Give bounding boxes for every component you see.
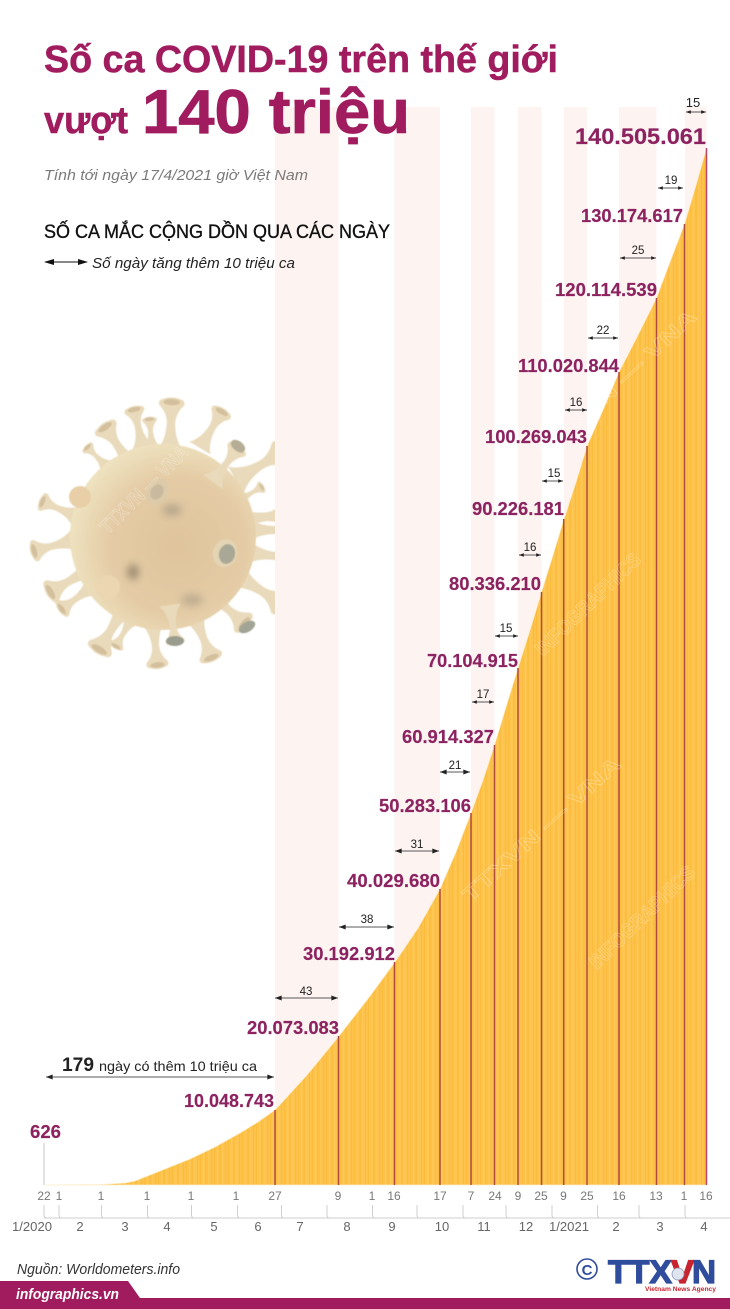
x axis: day labels: 16 [699,1189,713,1203]
day-span arrows: 16 [570,397,582,409]
legend: arrow meaning: Số ngày tăng thêm 10 triệu ca [92,255,295,272]
milestone value labels: 626 [30,1121,61,1142]
x axis: day labels: 1 [188,1189,195,1203]
day-span arrows: 15 [548,468,560,480]
logo: TTXVN: TTX [608,1254,673,1290]
footer band: infographics.vn [16,1286,119,1303]
milestone value labels: 10.048.743 [184,1090,274,1111]
x axis: month labels: 11 [477,1219,491,1234]
x axis: day labels: 17 [433,1189,447,1203]
x axis: day labels: 1 [56,1189,63,1203]
callout: 179 days: ngày có thêm 10 triệu ca [99,1058,257,1074]
chart heading: SỐ CA MẮC CỘNG DỒN QUA CÁC NGÀY [44,221,390,243]
logo: TTXVN: Vietnam News Agency [645,1286,716,1293]
x axis: month labels: 2 [76,1219,84,1234]
x axis: day labels: 9 [560,1189,567,1203]
callout: 179 days [46,1055,274,1077]
logo: TTXVN: V [671,1254,695,1290]
milestone value labels: 100.269.043 [485,426,587,447]
day-span arrows: 25 [632,245,644,257]
milestone value labels: 70.104.915 [427,650,518,671]
logo: TTXVN: N [692,1254,716,1290]
logo: TTXVN [577,1254,716,1293]
background month stripes [275,107,706,1185]
day-span arrows: 21 [449,760,461,772]
day-span arrows: 31 [411,839,423,851]
x axis: month labels: 3 [656,1219,664,1234]
x axis: month labels: 6 [254,1219,262,1234]
x axis: day labels: 22 [37,1189,51,1203]
milestone value labels: 20.073.083 [247,1017,339,1038]
x axis: month labels: 4 [700,1219,708,1234]
x axis: month labels: 4 [163,1219,171,1234]
milestone value labels: 30.192.912 [303,943,395,964]
illustration: coronavirus [29,397,275,670]
source: Nguồn: Worldometers.info [17,1262,180,1278]
day-span arrows [275,95,706,998]
milestone value labels [30,124,706,1142]
x axis: day labels: 9 [335,1189,342,1203]
x axis: month labels [12,1219,708,1234]
x axis: day labels: 13 [649,1189,663,1203]
x axis: month labels: 3 [121,1219,129,1234]
x axis: month labels: 1/2020 [12,1219,52,1234]
subtitle: date: Tính tới ngày 17/4/2021 giờ Việt Nam [44,167,308,184]
day-span arrows: 43 [300,986,312,998]
watermarks: INFOGRAPHICS [585,862,700,974]
x axis: month labels: 1/2021 [549,1219,589,1234]
x axis: day labels: 16 [612,1189,626,1203]
title: Số ca COVID-19 trên thế giới [44,39,558,81]
x axis: month labels: 7 [296,1219,304,1234]
x axis: month labels: 5 [210,1219,218,1234]
day-span arrows: 38 [361,914,373,926]
milestone value labels: 60.914.327 [402,726,494,747]
x axis: month brackets [44,1205,730,1218]
x axis: day labels: 1 [369,1189,376,1203]
day-span arrows: 19 [665,175,677,187]
milestone value labels: 90.226.181 [472,498,564,519]
x axis: day labels: 25 [534,1189,548,1203]
x axis: month labels: 12 [519,1219,533,1234]
title [44,39,558,147]
watermarks: TTXVN — VNA [536,306,701,462]
title: 140 triệu [142,78,410,147]
day-span arrows: 15 [500,623,512,635]
footer band [0,1281,730,1309]
x axis: day labels: 1 [681,1189,688,1203]
title: vượt [44,100,128,142]
milestone value labels: 130.174.617 [581,205,683,226]
x axis: day labels: 9 [515,1189,522,1203]
x axis: day labels: 24 [488,1189,502,1203]
milestone value labels: 80.336.210 [449,573,541,594]
day-span arrows: 17 [477,689,489,701]
chart: cumulative cases area [44,148,706,1185]
day-span arrows: 16 [524,542,536,554]
x axis: day labels: 7 [468,1189,475,1203]
x axis: day labels: 27 [268,1189,282,1203]
milestone value labels: 140.505.061 [575,124,706,149]
milestone value labels: 50.283.106 [379,795,471,816]
milestone lines [275,148,706,1185]
x axis: month labels: 10 [435,1219,449,1234]
day-span arrows: 15 [686,95,700,110]
x axis: day labels: 1 [233,1189,240,1203]
milestone value labels: 120.114.539 [555,279,657,300]
x axis: month labels: 8 [343,1219,351,1234]
watermarks: TTXVN — VNA [96,442,193,539]
x axis: day labels [37,1189,713,1203]
x axis: day labels: 16 [387,1189,401,1203]
watermarks: INFOGRAPHICS [531,549,646,661]
watermarks: TTXVN — VNA [459,753,626,907]
day-span arrows: 22 [597,325,609,337]
logo: TTXVN: C [582,1262,593,1279]
x axis: day labels: 1 [98,1189,105,1203]
watermarks [96,306,701,974]
milestone value labels: 110.020.844 [518,355,620,376]
callout: 179 days: 179 [62,1055,94,1076]
x axis: day labels: 25 [580,1189,594,1203]
x axis: month labels: 2 [612,1219,620,1234]
x axis: month labels: 9 [388,1219,396,1234]
x axis: day labels: 1 [144,1189,151,1203]
milestone value labels: 40.029.680 [347,870,440,891]
